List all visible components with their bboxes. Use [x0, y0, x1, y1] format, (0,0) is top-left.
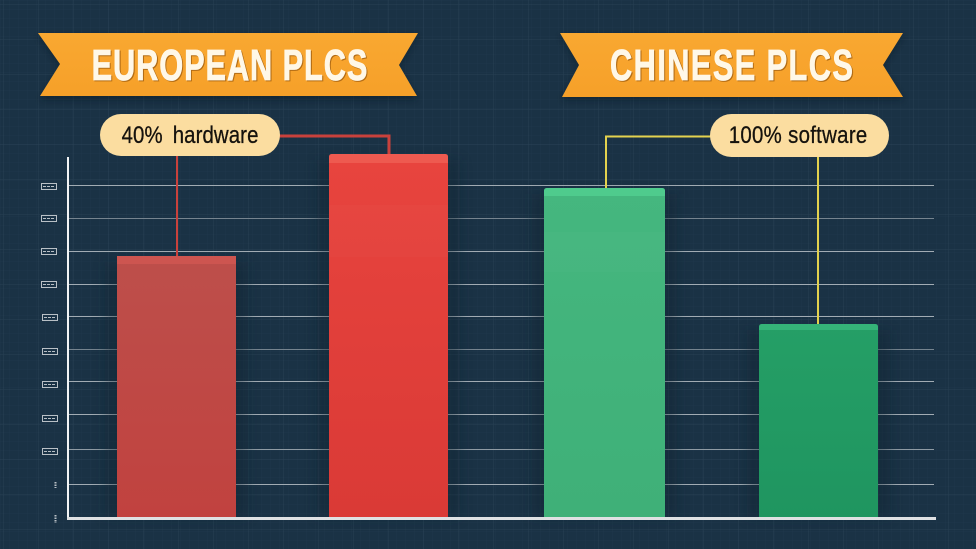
banner: Chinese PLCs [560, 33, 903, 100]
y-axis tick labels [42, 184, 58, 523]
connector: 100% software to bars [606, 136, 818, 324]
banner: European PLCs [38, 33, 418, 100]
bar: Chinese hardware [532, 188, 677, 518]
callout: 40% hardware [100, 114, 280, 156]
bar: European software [317, 154, 460, 518]
chart gridlines [68, 186, 934, 484]
banner: Chinese PLCs: CHINESE PLCS [611, 43, 854, 91]
banner: European PLCs: EUROPEAN PLCS [92, 42, 367, 90]
chart axes [67, 157, 936, 519]
banner: European PLCs: EUROPEAN PLCS [93, 43, 368, 91]
callout: 40% hardware: 40% hardware [122, 121, 258, 148]
banner: Chinese PLCs: CHINESE PLCS [610, 42, 853, 90]
connector: 40% hardware to bars [177, 136, 389, 256]
bar: Chinese software [747, 324, 890, 518]
callout: 100% software [710, 114, 889, 157]
callout: 100% software: 100% software [729, 121, 867, 148]
bar: European hardware [105, 256, 248, 518]
